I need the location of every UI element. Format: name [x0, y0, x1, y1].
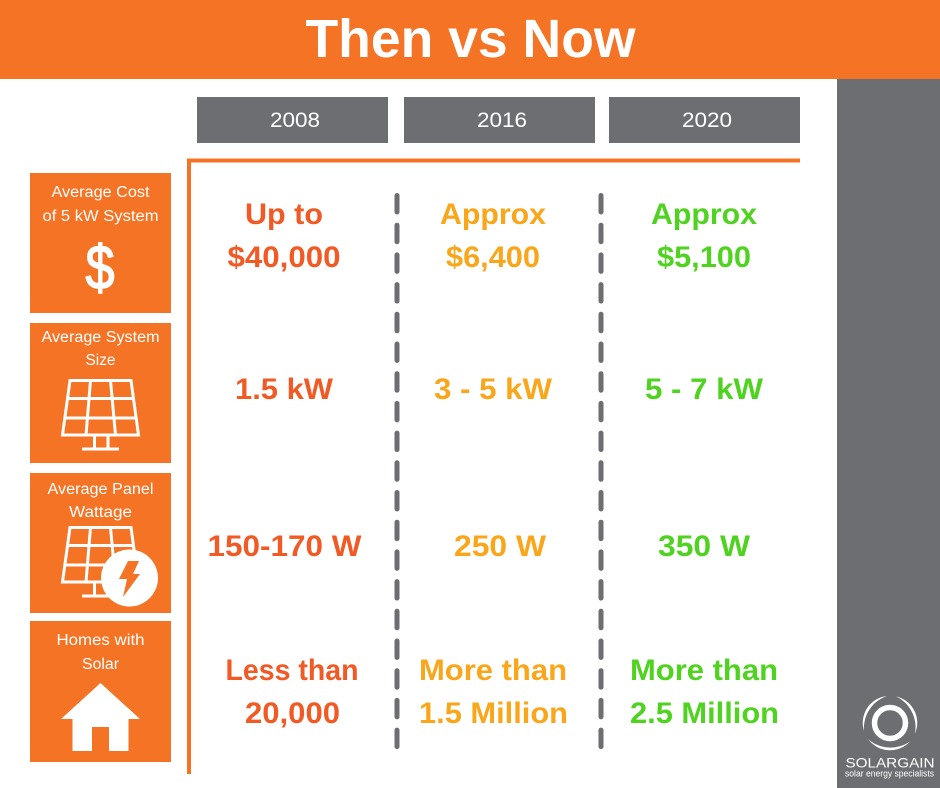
year header: 2020: 2020 [682, 109, 732, 132]
panel: homes with solar: Solar [82, 656, 119, 673]
header banner [0, 0, 940, 79]
values: 2016 column: 3 - 5 kW [434, 373, 553, 406]
values: 2020 column: Approx [651, 198, 757, 231]
panel: average panel wattage: Wattage [69, 504, 132, 521]
panel: average system size [30, 323, 171, 463]
values: 2008 column: Up to [245, 198, 323, 231]
panel: average panel wattage: Average Panel [48, 481, 154, 498]
panel: average cost: of 5 kW System [42, 208, 158, 225]
panel: homes with solar [30, 621, 171, 762]
values: 2020 column: More than [630, 654, 778, 687]
values: 2020 column: 350 W [658, 530, 751, 563]
values: 2008 column: 1.5 kW [235, 373, 334, 406]
year header: 2020 [609, 97, 800, 143]
icon: house [61, 683, 140, 751]
values: 2020 column: 2.5 Million [630, 697, 779, 730]
panel: average system size: Average System [42, 329, 160, 346]
values: 2016 column: More than [419, 654, 567, 687]
values: 2016 column: 250 W [454, 530, 547, 563]
table frame lines [189, 160, 800, 774]
panel: average cost: Average Cost [52, 184, 150, 201]
values: 2008 column: $40,000 [228, 241, 340, 274]
year header: 2016 [404, 97, 595, 143]
logo: Solargain: SOLARGAIN [846, 754, 934, 770]
icon: solar panel with bolt [62, 528, 158, 606]
panel: average system size: Size [86, 352, 116, 369]
values: 2016 column: $6,400 [446, 241, 540, 274]
year header: 2008 [197, 97, 388, 143]
values: 2016 column: Approx [440, 198, 546, 231]
year header: 2016: 2016 [477, 109, 527, 132]
panel: homes with solar: Homes with [56, 632, 144, 649]
logo: Solargain [845, 695, 934, 778]
values: 2008 column [208, 198, 362, 730]
values: 2008 column: 150-170 W [208, 530, 362, 563]
values: 2016 column [419, 198, 568, 730]
panel: average panel wattage [30, 473, 171, 613]
column divider 1 [394, 196, 400, 752]
panel: average cost [30, 173, 171, 313]
year header: 2008: 2008 [270, 109, 320, 132]
values: 2016 column: 1.5 Million [419, 697, 568, 730]
values: 2008 column: 20,000 [245, 697, 340, 730]
column divider 2 [598, 196, 604, 752]
values: 2020 column: $5,100 [657, 241, 751, 274]
values: 2020 column [630, 198, 779, 730]
logo: Solargain: solar energy specialists [845, 768, 934, 778]
title: Then vs Now [306, 9, 636, 69]
icon: dollar sign: $ [86, 234, 114, 303]
icon: swirl [863, 695, 927, 760]
grey side panel [837, 79, 940, 788]
values: 2020 column: 5 - 7 kW [645, 373, 764, 406]
values: 2008 column: Less than [226, 654, 358, 687]
icon: solar panel [62, 380, 138, 449]
